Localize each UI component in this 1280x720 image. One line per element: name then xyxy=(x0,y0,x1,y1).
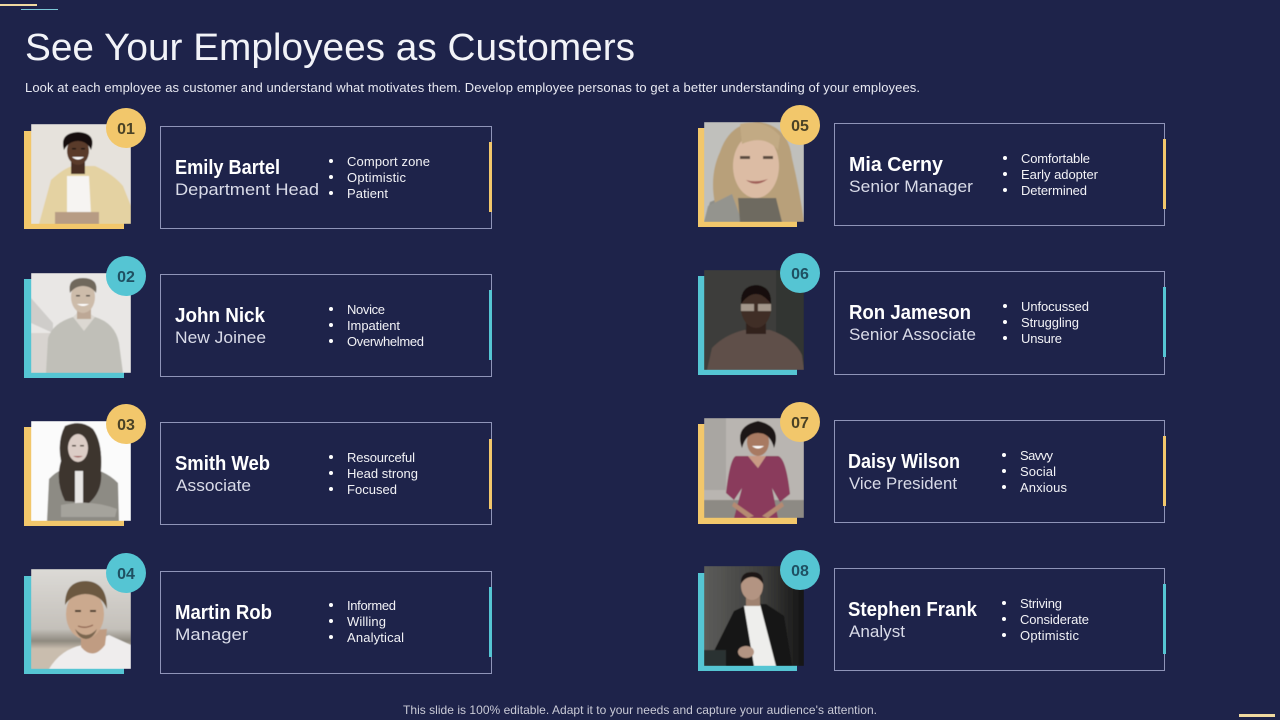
traits list: Informed xyxy=(347,598,396,613)
name and role: Analyst xyxy=(849,622,905,641)
name and role: Vice President xyxy=(849,474,957,493)
traits list: Unsure xyxy=(1021,331,1062,346)
traits list xyxy=(329,154,430,201)
traits list: Anxious xyxy=(1020,480,1068,495)
name and role: Department Head xyxy=(175,180,319,199)
traits list: Early adopter xyxy=(1021,167,1099,182)
badge 03 xyxy=(106,404,146,444)
photo: Smith Web xyxy=(31,421,131,521)
badge 06 xyxy=(780,253,820,293)
persona card 08: Stephen Frank xyxy=(698,550,1166,671)
badge 04 xyxy=(106,553,146,593)
traits list xyxy=(1002,596,1089,643)
traits list: Unfocussed xyxy=(1021,299,1089,314)
badge 01: 01 xyxy=(117,121,135,138)
name and role xyxy=(175,157,319,199)
traits list: Optimistic xyxy=(347,170,406,185)
photo: Daisy Wilson xyxy=(704,418,804,518)
name and role: Smith Web xyxy=(175,453,270,475)
persona card 02: John Nick xyxy=(24,256,492,378)
badge 03: 03 xyxy=(117,417,135,434)
name and role: Senior Manager xyxy=(849,177,973,196)
badge 02: 02 xyxy=(117,269,135,286)
name and role: John Nick xyxy=(175,305,266,327)
name and role: Manager xyxy=(175,625,248,644)
badge 07 xyxy=(780,402,820,442)
name and role xyxy=(849,302,976,344)
traits list: Comfortable xyxy=(1021,151,1090,166)
name and role: Stephen Frank xyxy=(848,599,978,621)
badge 07: 07 xyxy=(791,415,809,432)
traits list: Struggling xyxy=(1021,315,1079,330)
name and role: Daisy Wilson xyxy=(848,451,960,473)
name and role xyxy=(848,451,960,493)
badge 05: 05 xyxy=(791,118,809,135)
traits list: Optimistic xyxy=(1020,628,1080,643)
title: See Your Employees as Customers xyxy=(25,27,635,69)
subtitle text: Look at each employee as customer and understand what motivates them. Develop employee personas to get a better understanding of your employees. xyxy=(25,80,920,95)
badge 08: 08 xyxy=(791,563,809,580)
traits list: Focused xyxy=(347,482,397,497)
persona card 03: Smith Web xyxy=(24,404,492,526)
badge 06: 06 xyxy=(791,266,809,283)
traits list: Novice xyxy=(347,302,385,317)
traits list: Striving xyxy=(1020,596,1062,611)
photo: John Nick xyxy=(31,273,131,373)
badge 05 xyxy=(780,105,820,145)
traits list xyxy=(329,598,404,645)
badge 04: 04 xyxy=(117,566,135,583)
traits list: Head strong xyxy=(347,466,418,481)
traits list: Overwhelmed xyxy=(347,334,424,349)
persona card 06: Ron Jameson xyxy=(698,253,1166,375)
persona card 07: Daisy Wilson xyxy=(698,402,1166,524)
badge 02 xyxy=(106,256,146,296)
photo: Mia Cerny xyxy=(704,122,804,222)
name and role xyxy=(175,305,266,347)
name and role: Ron Jameson xyxy=(849,302,971,324)
name and role: Mia Cerny xyxy=(849,154,944,176)
name and role xyxy=(848,599,978,641)
name and role xyxy=(175,453,270,495)
name and role xyxy=(849,154,973,196)
footer note: This slide is 100% editable. Adapt it to your needs and capture your audience's attention. xyxy=(403,703,877,717)
name and role: New Joinee xyxy=(175,328,266,347)
traits list xyxy=(329,450,418,497)
traits list xyxy=(329,302,424,349)
traits list: Social xyxy=(1020,464,1056,479)
traits list: Analytical xyxy=(347,630,404,645)
traits list: Considerate xyxy=(1020,612,1089,627)
traits list: Determined xyxy=(1021,183,1087,198)
traits list: Willing xyxy=(347,614,386,629)
traits list xyxy=(1003,299,1089,346)
badge 01 xyxy=(106,108,146,148)
traits list: Patient xyxy=(347,186,388,201)
name and role xyxy=(175,602,272,644)
name and role: Martin Rob xyxy=(175,602,272,624)
traits list: Comport zone xyxy=(347,154,430,169)
persona card 05: Mia Cerny xyxy=(698,105,1166,227)
badge 08 xyxy=(780,550,820,590)
traits list: Savvy xyxy=(1020,448,1054,463)
name and role: Senior Associate xyxy=(849,325,976,344)
photo: Ron Jameson xyxy=(704,270,804,370)
persona card 01: Emily Bartel xyxy=(24,108,492,229)
photo: Emily Bartel xyxy=(31,124,131,224)
traits list: Impatient xyxy=(347,318,400,333)
persona card 04: Martin Rob xyxy=(24,553,492,674)
traits list xyxy=(1003,151,1099,198)
name and role: Associate xyxy=(176,476,251,495)
photo: Stephen Frank xyxy=(704,566,804,666)
traits list xyxy=(1002,448,1068,495)
traits list: Resourceful xyxy=(347,450,415,465)
photo: Martin Rob xyxy=(31,569,131,669)
name and role: Emily Bartel xyxy=(175,157,280,179)
